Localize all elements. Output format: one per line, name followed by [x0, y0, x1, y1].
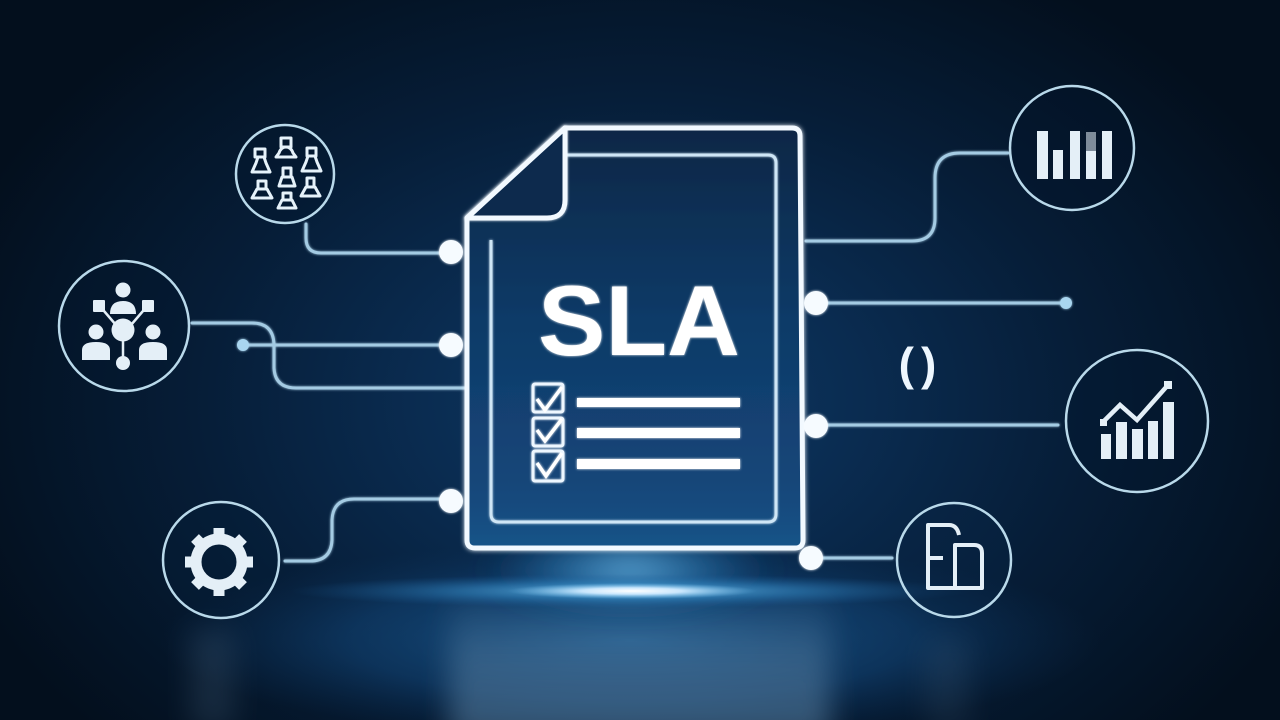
node: right lower	[799, 546, 823, 570]
node: right middle	[804, 414, 828, 438]
icon: team group circle	[236, 125, 334, 223]
parentheses glyph: ()	[899, 338, 943, 390]
connector lines	[192, 153, 1065, 561]
document body	[467, 128, 803, 548]
checklist row 3	[533, 451, 740, 481]
SLA title: SLA	[538, 265, 740, 376]
inner page outline	[491, 155, 776, 522]
folded corner	[467, 128, 565, 218]
connector: short dotted line to document	[243, 344, 440, 346]
connector: growth chart circle to document	[826, 424, 1058, 426]
connector: team circle to document	[306, 224, 440, 253]
icon: gear circle	[163, 502, 279, 618]
icon: bar chart circle	[1010, 86, 1134, 210]
checklist row 1	[533, 384, 740, 412]
small dot: right line end	[1060, 297, 1072, 309]
node: left top	[439, 240, 463, 264]
node: left bottom	[439, 489, 463, 513]
connector: bar chart circle to document	[806, 153, 1008, 241]
document	[467, 128, 803, 548]
connector: right dotted line	[826, 302, 1065, 304]
node: right upper	[804, 291, 828, 315]
connector: document icon circle to document	[820, 556, 892, 560]
icon: organisation circle	[59, 261, 189, 391]
icon: document circle	[897, 503, 1011, 617]
connector: gear circle to document	[285, 499, 440, 561]
connector nodes	[237, 240, 1072, 570]
icon: growth chart circle	[1066, 350, 1208, 492]
small dot: left line end	[237, 339, 249, 351]
light glow under document	[290, 528, 970, 612]
connector: organisation circle to document	[192, 323, 464, 388]
node: left middle	[439, 333, 463, 357]
checklist row 2	[533, 418, 740, 446]
checklist	[533, 384, 740, 481]
